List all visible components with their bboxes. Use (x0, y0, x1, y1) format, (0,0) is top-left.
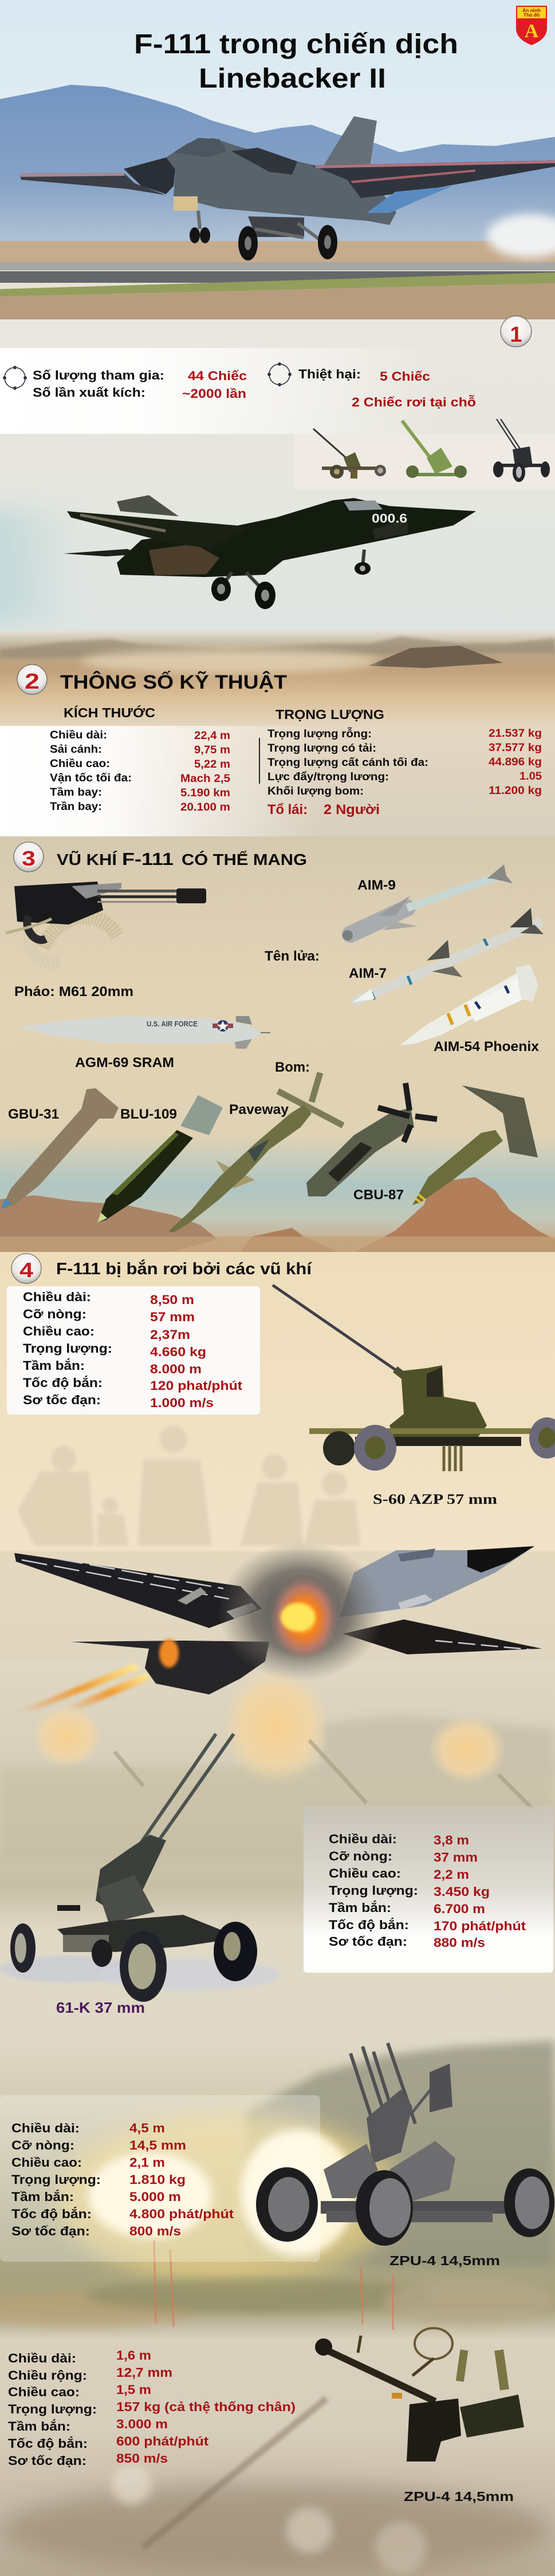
losses stats: 2 Chiếc rơi tại chỗ (352, 395, 476, 409)
61-K specs panel: 880 m/s (434, 1935, 485, 1950)
logo shield: An ninh (522, 7, 541, 13)
61-K specs panel (304, 1806, 553, 1973)
ZPU single gun specs: 12,7 mm (116, 2365, 172, 2380)
BLU-109 bomb (97, 1095, 223, 1223)
crew: Tổ lái: (267, 802, 308, 817)
Paveway bomb (168, 1073, 343, 1232)
ZPU-4 specs: 1.810 kg (129, 2172, 186, 2187)
ZPU single gun specs: Tầm bắn: (8, 2419, 70, 2433)
GBU-31 bomb (1, 1088, 119, 1209)
dimensions column: Chiều cao: (50, 758, 110, 770)
dark F-111 jet (64, 495, 476, 609)
losses stats: Thiệt hại: (298, 367, 361, 381)
label: ZPU-4 14,5mm (404, 2489, 514, 2504)
AIM-9 missile (343, 864, 513, 941)
desert background (0, 1177, 555, 1252)
badge 4: 4 (19, 1258, 33, 1282)
heading: CÓ THỂ MANG (182, 851, 307, 868)
S-60 specs panel: Tầm bắn: (23, 1358, 85, 1373)
section 2: specifications (0, 630, 555, 836)
AGM-69 SRAM: U.S. AIR FORCE (147, 1020, 198, 1028)
badge 2 (17, 665, 47, 694)
ZPU-4 specs: 2,1 m (129, 2155, 165, 2170)
weights column: 11.200 kg (489, 785, 542, 797)
label: AGM-69 SRAM (75, 1055, 174, 1070)
fifth bomb (412, 1085, 538, 1205)
section 3: weapons (0, 836, 555, 1252)
icon: small twin gun (493, 419, 550, 482)
61-K gun (0, 1734, 281, 2002)
ZPU-4 specs: Sơ tốc đạn: (11, 2224, 90, 2238)
ZPU single gun specs: 1,5 m (116, 2383, 151, 2397)
S-60 specs panel (7, 1286, 260, 1415)
bomb labels: GBU-31 (8, 1107, 59, 1122)
icon: ring left (3, 366, 27, 390)
section 6: ZPU guns (0, 2038, 555, 2576)
S-60 specs panel: 8,50 m (150, 1293, 194, 1307)
dimensions column: Vận tốc tối đa: (50, 772, 132, 784)
ZPU single gun specs: 3.000 m (116, 2417, 168, 2431)
dimensions column: 20.100 m (180, 801, 230, 813)
dimensions column: Sải cánh: (50, 744, 102, 756)
losses stats: 5 Chiếc (380, 369, 430, 384)
missile labels: AIM-9 (357, 878, 396, 893)
badge 3 (14, 842, 44, 872)
heading: F-111 bị bắn rơi bởi các vũ khí (56, 1259, 312, 1278)
S-60 specs panel: Cỡ nòng: (23, 1307, 86, 1321)
S-60 specs panel: 4.660 kg (150, 1345, 206, 1359)
M61 cannon (6, 882, 206, 962)
label: ZPU-4 14,5mm (389, 2253, 500, 2268)
ZPU single gun specs: Chiều cao: (8, 2385, 80, 2399)
participation stats: Số lượng tham gia: (33, 368, 164, 382)
crew (267, 802, 380, 817)
AIM-7 missile (352, 908, 544, 1002)
losses stats (298, 367, 476, 409)
ZPU-4 specs (11, 2121, 234, 2238)
hero section (0, 0, 555, 319)
weights column (267, 707, 542, 797)
S-60 specs panel: 2,37m (150, 1327, 190, 1342)
S-60 gun (273, 1285, 555, 1471)
ZPU-4 specs: Cỡ nòng: (11, 2138, 74, 2152)
ZPU single gun specs: 850 m/s (116, 2451, 168, 2466)
exploding F-111 (14, 1542, 542, 1713)
weights column: 44.896 kg (489, 756, 542, 768)
61-K specs panel: Tầm bắn: (329, 1901, 391, 1915)
badge 4 (11, 1254, 41, 1283)
missile labels: AIM-7 (349, 966, 387, 981)
AGM-69 SRAM (18, 1016, 270, 1049)
participation stats: Số lần xuất kích: (33, 385, 145, 400)
soldiers background (17, 1425, 361, 1546)
weights column: Trọng lượng cất cánh tối đa: (267, 757, 428, 769)
ZPU single gun specs: Chiều rộng: (8, 2368, 87, 2383)
ZPU-4 specs: Chiều cao: (11, 2155, 82, 2170)
weights column: TRỌNG LƯỢNG (275, 707, 384, 722)
missile labels: Tên lửa: (265, 949, 320, 964)
heading: F-111 (122, 849, 174, 869)
61-K specs panel: Cỡ nòng: (329, 1849, 392, 1863)
label: 61-K 37 mm (56, 1999, 145, 2016)
S-60 specs panel: Trọng lượng: (23, 1341, 112, 1356)
weights column: Trọng lượng có tải: (267, 742, 376, 754)
heading (57, 849, 307, 869)
title: Linebacker II (199, 64, 386, 94)
explosion (159, 1542, 384, 1681)
61-K specs panel: 6.700 m (434, 1902, 485, 1916)
icon: ring right (267, 362, 292, 386)
ZPU single gun specs (8, 2348, 296, 2468)
firing range background (0, 1666, 555, 1863)
61-K specs panel: Tốc độ bắn: (329, 1918, 409, 1932)
label: S-60 AZP 57 mm (373, 1492, 497, 1507)
section 1: overview (0, 316, 555, 630)
S-60 specs panel: Chiều dài: (23, 1290, 91, 1304)
dark F-111 jet: 000.6 (372, 511, 407, 526)
61-K specs panel: 2,2 m (434, 1867, 469, 1882)
title: F-111 trong chiến dịch (134, 29, 458, 60)
61-K specs panel: Trọng lượng: (329, 1883, 418, 1898)
logo shield: A (525, 21, 539, 42)
ZPU-4 specs: 5.000 m (129, 2190, 181, 2204)
logo shield: Thủ đô (523, 12, 540, 18)
label: Bom: (275, 1060, 310, 1075)
ZPU-4 specs: Tầm bắn: (11, 2190, 74, 2204)
ZPU-4 specs: 800 m/s (129, 2224, 181, 2238)
title (134, 29, 458, 94)
ZPU-4 quad gun (256, 2043, 554, 2246)
dimensions column: 22,4 m (194, 730, 230, 742)
AIM-54 missile (400, 965, 538, 1045)
dimensions column: Trần bay: (50, 801, 102, 813)
ZPU-4 specs: Tốc độ bắn: (11, 2207, 92, 2221)
icon: small green gun (402, 421, 467, 478)
weights column: 1.05 (519, 771, 542, 783)
single barrel machine gun (315, 2328, 524, 2462)
ZPU single gun specs: Sơ tốc đạn: (8, 2453, 86, 2468)
crew: 2 Người (324, 802, 380, 817)
61-K specs panel: 170 phát/phút (434, 1919, 526, 1933)
weights column: Khối lượng bom: (267, 785, 364, 797)
61-K specs panel: 3,8 m (434, 1833, 469, 1847)
dimensions column: 5.190 km (180, 787, 230, 799)
badge 1 (501, 316, 532, 347)
dimensions column: Tầm bay: (50, 787, 102, 799)
S-60 specs panel: Tốc độ bắn: (23, 1376, 103, 1390)
dimensions column: KÍCH THƯỚC (64, 705, 155, 720)
ZPU-4 specs: 4.800 phát/phút (129, 2207, 234, 2221)
section 5: 61-K gun (0, 1660, 555, 2038)
61-K specs panel: Sơ tốc đạn: (329, 1934, 407, 1949)
label: Pháo: M61 20mm (14, 984, 133, 999)
61-K specs panel: 37 mm (434, 1850, 478, 1864)
S-60 specs panel: 8.000 m (150, 1362, 202, 1376)
logo shield (516, 6, 547, 45)
battlefield background (0, 2041, 555, 2576)
61-K specs panel: Chiều cao: (329, 1866, 401, 1880)
badge 2: 2 (25, 670, 40, 694)
ZPU-4 specs: Trọng lượng: (11, 2172, 101, 2187)
ZPU single gun specs: Chiều dài: (8, 2351, 76, 2365)
ZPU single gun specs: 1,6 m (116, 2348, 151, 2362)
weights column: Trọng lượng rỗng: (267, 728, 372, 740)
61-K specs panel: 3.450 kg (434, 1884, 490, 1899)
missile labels (265, 878, 540, 1054)
ZPU single gun specs: 600 phát/phút (116, 2434, 209, 2448)
bomb labels: CBU-87 (353, 1187, 404, 1203)
icon: small gun 57mm (313, 429, 386, 479)
S-60 specs panel: 57 mm (150, 1310, 195, 1324)
S-60 specs panel: Chiều cao: (23, 1324, 95, 1338)
bomb labels (8, 1102, 404, 1203)
participation stats (33, 368, 247, 401)
ZPU-4 specs: 4,5 m (129, 2121, 165, 2135)
weights column: Lực đẩy/trọng lương: (267, 771, 389, 783)
flame trail (14, 1663, 150, 1713)
ZPU-4 specs: Chiều dài: (11, 2121, 80, 2135)
section 4: shootdown (0, 1252, 555, 1713)
S-60 specs panel: 120 phat/phút (150, 1378, 243, 1393)
participation stats: ~2000 lần (182, 386, 246, 401)
dimensions column: 9,75 m (194, 744, 230, 756)
S-60 specs panel: Sơ tốc đạn: (23, 1393, 101, 1407)
61-K specs panel: Chiều dài: (329, 1832, 397, 1846)
badge 3: 3 (22, 847, 36, 870)
dimensions column: 5,22 m (194, 758, 230, 771)
S-60 specs panel: 1.000 m/s (150, 1396, 214, 1410)
dimensions column: Chiều dài: (50, 729, 107, 741)
weights column: 37.577 kg (489, 742, 542, 754)
participation stats: 44 Chiếc (188, 369, 247, 383)
ZPU single gun specs: Tốc độ bắn: (8, 2436, 88, 2451)
heading: THÔNG SỐ KỸ THUẬT (60, 671, 287, 693)
missile labels: AIM-54 Phoenix (434, 1039, 540, 1054)
ZPU single gun specs: 157 kg (cả thệ thống chân) (116, 2400, 296, 2414)
ZPU-4 specs: 14,5 mm (129, 2138, 186, 2152)
dimensions column (50, 705, 230, 813)
dimensions column: Mach 2,5 (180, 773, 230, 785)
heading: VŨ KHÍ (57, 851, 117, 868)
bomb labels: BLU-109 (120, 1107, 177, 1122)
badge 1: 1 (510, 323, 522, 347)
weights column: 21.537 kg (489, 728, 542, 740)
CBU-87 bomb (306, 1083, 437, 1196)
bomb labels: Paveway (229, 1102, 289, 1117)
hero jet (19, 116, 555, 260)
ZPU single gun specs: Trọng lượng: (8, 2402, 97, 2416)
